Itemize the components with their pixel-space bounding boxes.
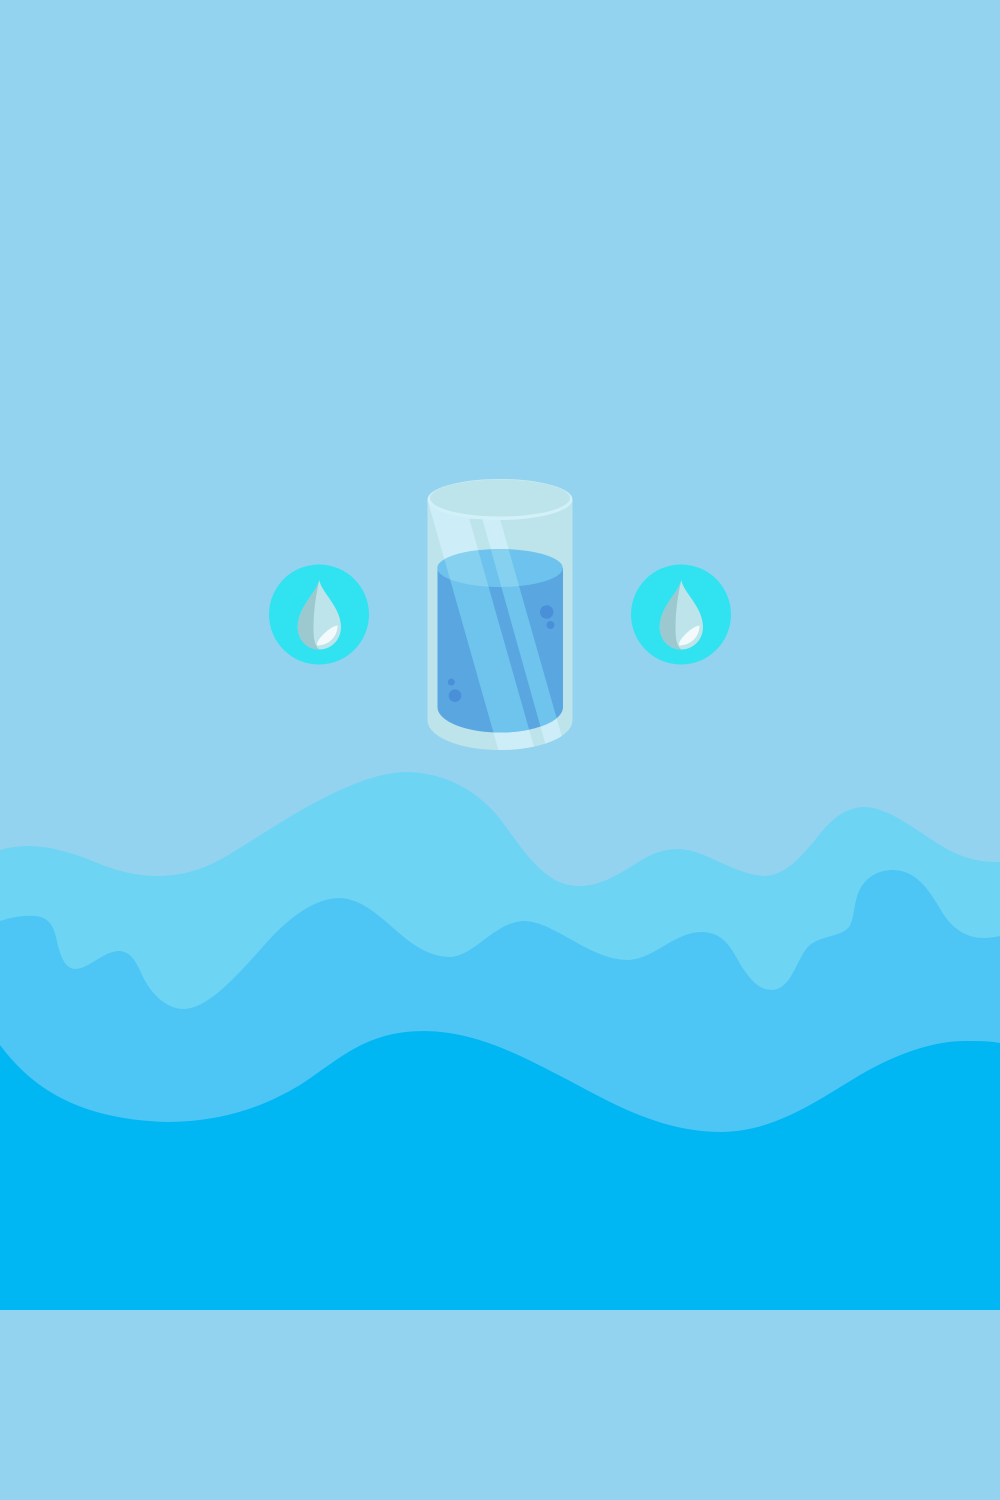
glass rim — [428, 479, 572, 520]
illustration: glass of water over waves — [0, 479, 1000, 1310]
water surface highlights — [444, 549, 519, 587]
drop shape — [660, 580, 703, 650]
water highlights — [450, 580, 556, 732]
icon: water drop badge right — [631, 564, 731, 664]
drop shape — [298, 580, 341, 650]
wave: front layer — [0, 1031, 1000, 1310]
glass body — [428, 499, 572, 750]
drop shadow side — [298, 580, 319, 650]
drop shine — [317, 626, 338, 646]
icon: water drop badge left — [269, 564, 369, 664]
drop shine — [679, 626, 700, 646]
wave: back layer — [0, 772, 1000, 1310]
glass opening — [430, 480, 570, 516]
water surface — [437, 549, 563, 587]
bubbles — [448, 605, 554, 702]
drop shadow side — [660, 580, 681, 650]
water body — [438, 568, 563, 732]
glass — [427, 479, 572, 751]
wave: middle layer — [0, 870, 1000, 1310]
glass highlights — [427, 499, 566, 751]
